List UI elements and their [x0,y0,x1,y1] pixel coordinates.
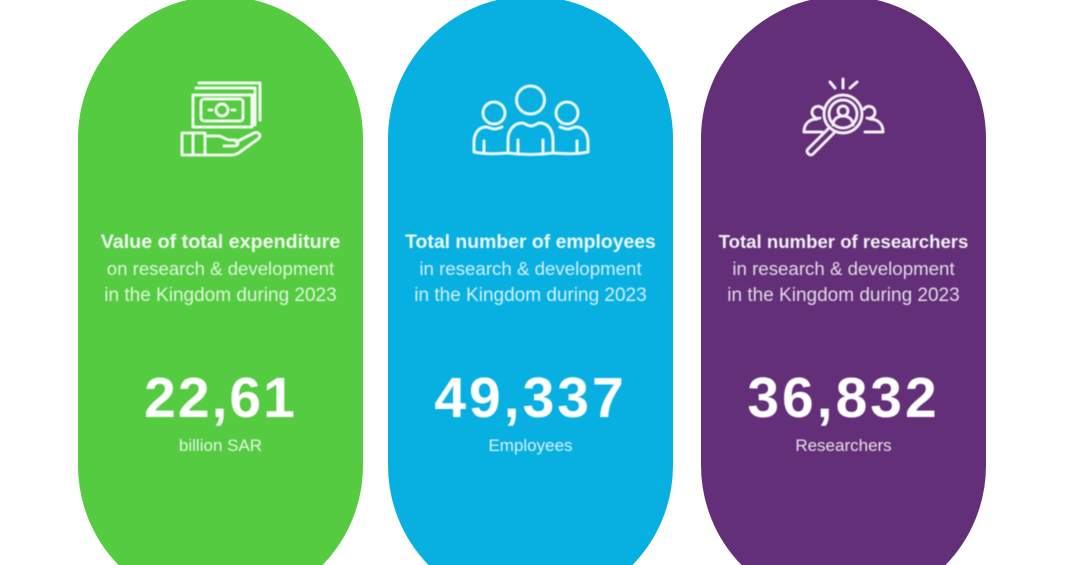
unit: billion SAR: billion SAR [179,436,262,455]
number: expenditure value: 22,61 [144,366,297,430]
unit: researchers: Researchers [795,436,892,455]
text: employees line 3: in the Kingdom during 2023 [414,284,647,306]
text: expenditure line 3: in the Kingdom during 2023 [104,284,337,306]
text: employees line 2: in research & development [419,258,642,279]
unit: employees: Employees [488,436,573,455]
heading: researchers: Total number of researchers [719,231,968,252]
number: employees value: 49,337 [434,366,627,430]
text: researchers line 3: in the Kingdom during 2023 [727,284,960,306]
icon: researcher under magnifier [802,76,886,158]
panel: employees [388,0,673,565]
icon: money in hand [180,80,262,158]
text: researchers line 2: in research & development [732,258,955,279]
number: researchers value: 36,832 [747,366,940,430]
panel: researchers [701,0,986,565]
icon: group of people [472,84,590,157]
panel: expenditure [78,0,363,565]
heading: employees: Total number of employees [405,231,656,253]
heading: expenditure: Value of total expenditure [101,231,340,253]
text: expenditure line 2: on research & development [107,258,334,279]
